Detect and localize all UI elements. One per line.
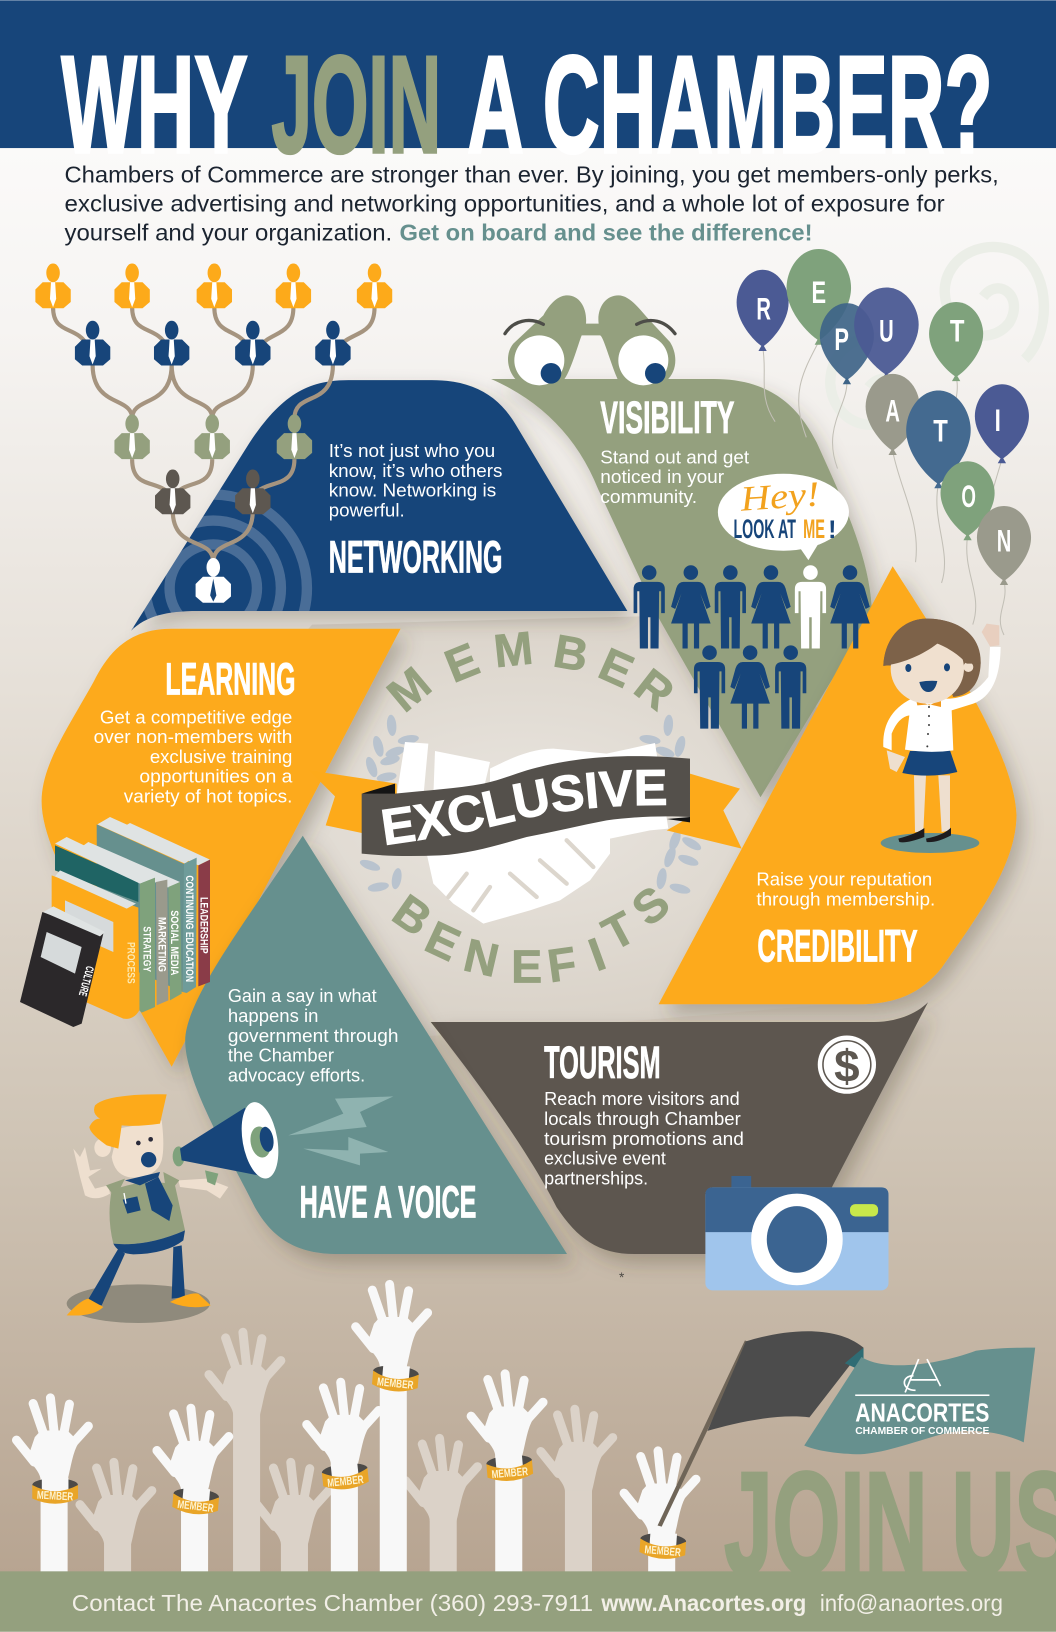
icon: stack of books: LEADERSHIP <box>197 897 209 954</box>
balloons: reputation: I <box>995 403 1001 438</box>
visibility text: VISIBILITY <box>600 392 735 443</box>
intro text <box>65 161 999 246</box>
icon: camera <box>705 1176 888 1290</box>
wristbands: MEMBER <box>376 1376 414 1392</box>
raised hands: background <box>80 1332 613 1572</box>
icon: stack of books <box>20 817 210 1027</box>
speech bubble <box>718 473 849 560</box>
icon: stack of books: PROCESS <box>125 942 137 984</box>
title: JOIN <box>272 28 441 182</box>
banner <box>362 756 690 856</box>
balloons: reputation: T <box>933 413 948 448</box>
icon: binoculars <box>505 295 675 385</box>
balloons: reputation: U <box>879 314 894 349</box>
footer contact text <box>72 1590 1003 1616</box>
icon: crowd of people <box>634 565 870 729</box>
footer contact text: www.Anacortes.org <box>600 1590 806 1616</box>
credibility text <box>756 869 935 972</box>
footer contact text: Contact The Anacortes Chamber (360) 293-7911 <box>72 1590 593 1616</box>
credibility text: through membership. <box>756 888 935 909</box>
arc text: benefits: BENEFITS <box>384 876 679 992</box>
networking text: powerful. <box>329 499 405 520</box>
decorative swirls <box>830 247 1044 425</box>
intro text: exclusive advertising and networking opportunities, and a whole lot of exposure for <box>65 191 945 217</box>
panel: tourism <box>431 1002 928 1254</box>
icon: stack of books: MARKETING <box>155 917 167 972</box>
wristbands <box>32 1363 687 1560</box>
intro text: yourself and your organization. <box>65 220 392 246</box>
networking tree <box>35 264 392 603</box>
tourism text: partnerships. <box>544 1167 648 1188</box>
panel: networking <box>131 378 638 633</box>
flag with chamber logo: CHAMBER OF COMMERCE <box>855 1426 990 1437</box>
balloons: reputation: R <box>756 292 771 327</box>
tourism text: TOURISM <box>544 1037 661 1088</box>
learning text: variety of hot topics. <box>124 785 292 806</box>
balloons: reputation: O <box>961 479 976 514</box>
wristbands: MEMBER <box>177 1499 215 1515</box>
speech bubble: Hey! <box>738 473 821 519</box>
footer contact text: info@anaortes.org <box>820 1590 1003 1616</box>
character: woman waving <box>881 619 1001 853</box>
flag with chamber logo: ANACORTES <box>855 1398 989 1428</box>
handshake <box>397 742 668 924</box>
balloons: reputation <box>737 249 1031 635</box>
icon: stack of books: STRATEGY <box>140 926 152 972</box>
icon: stack of books: SOCIAL MEDIA <box>168 910 180 975</box>
balloons: reputation: A <box>885 394 900 429</box>
speech bubble: ! <box>828 516 836 544</box>
credibility text: Raise your reputation <box>756 869 932 890</box>
arc text: member: MEMBER <box>377 621 684 722</box>
tourism text: locals through Chamber <box>544 1108 741 1129</box>
wristbands: MEMBER <box>37 1490 74 1504</box>
panel: credibility <box>659 566 1016 1004</box>
tourism text <box>544 1037 744 1188</box>
title: WHY <box>61 28 248 182</box>
asterisk mark: * <box>619 1270 625 1285</box>
laurel wreath <box>358 714 703 896</box>
speech bubble: ME <box>803 514 825 544</box>
flag with chamber logo <box>658 1331 1035 1527</box>
visibility text: community. <box>600 486 697 507</box>
balloons: reputation: T <box>950 314 964 349</box>
intro text: Chambers of Commerce are stronger than ever. By joining, you get members-only perks, <box>65 161 999 187</box>
have a voice text: advocacy efforts. <box>228 1064 365 1085</box>
networking text: know, it’s who others <box>329 460 503 481</box>
credibility text: CREDIBILITY <box>757 921 918 972</box>
title <box>61 28 993 182</box>
intro text: Get on board and see the difference! <box>400 220 813 246</box>
networking text <box>329 440 503 583</box>
icon: lightning bolts <box>288 1096 393 1165</box>
banner text: EXCLUSIVE <box>382 770 666 846</box>
wristbands: MEMBER <box>644 1544 682 1559</box>
learning text: exclusive training <box>150 746 292 767</box>
have a voice text: the Chamber <box>228 1045 334 1066</box>
tourism text: exclusive event <box>544 1148 667 1169</box>
networking text: NETWORKING <box>329 532 503 583</box>
have a voice text: HAVE A VOICE <box>300 1177 477 1228</box>
learning text <box>94 653 295 806</box>
have a voice text: happens in <box>228 1005 318 1026</box>
learning text: over non-members with <box>94 726 292 747</box>
icon: stack of books: CULTURE <box>76 965 95 998</box>
visibility text: Stand out and get <box>600 446 750 467</box>
icon: dollar coin <box>818 1036 876 1094</box>
speech bubble: LOOK AT <box>733 514 796 544</box>
learning text: LEARNING <box>165 653 295 704</box>
wristbands: MEMBER <box>491 1466 529 1481</box>
panel: visibility <box>491 379 872 797</box>
ribbon tails <box>309 770 742 849</box>
header band <box>0 0 1056 148</box>
panel: learning <box>42 629 401 1067</box>
icon: dollar coin: $ <box>834 1040 860 1091</box>
balloons: reputation: P <box>834 322 849 357</box>
learning text: opportunities on a <box>139 766 293 787</box>
have a voice text: Gain a say in what <box>228 985 377 1006</box>
networking text: It’s not just who you <box>329 440 495 461</box>
have a voice text <box>228 985 477 1228</box>
icon: stack of books: CONTINUING EDUCATION <box>183 875 195 982</box>
wristbands: MEMBER <box>327 1474 365 1490</box>
have a voice text: government through <box>228 1025 398 1046</box>
footer band <box>0 1571 1056 1632</box>
tourism text: Reach more visitors and <box>544 1088 740 1109</box>
center badge: exclusive member benefits <box>320 621 742 992</box>
panel: have a voice <box>185 836 567 1254</box>
visibility text <box>600 392 750 507</box>
learning text: Get a competitive edge <box>100 706 292 727</box>
icon: megaphone <box>173 1099 284 1181</box>
balloons: reputation: N <box>997 524 1011 559</box>
raised hands: members <box>16 1284 696 1572</box>
panel core: centre background <box>125 614 916 1051</box>
visibility text: noticed in your <box>600 466 724 487</box>
networking text: know. Networking is <box>329 480 496 501</box>
tourism text: tourism promotions and <box>544 1128 744 1149</box>
character: man with megaphone <box>67 1094 393 1323</box>
balloons: reputation: E <box>812 275 826 310</box>
